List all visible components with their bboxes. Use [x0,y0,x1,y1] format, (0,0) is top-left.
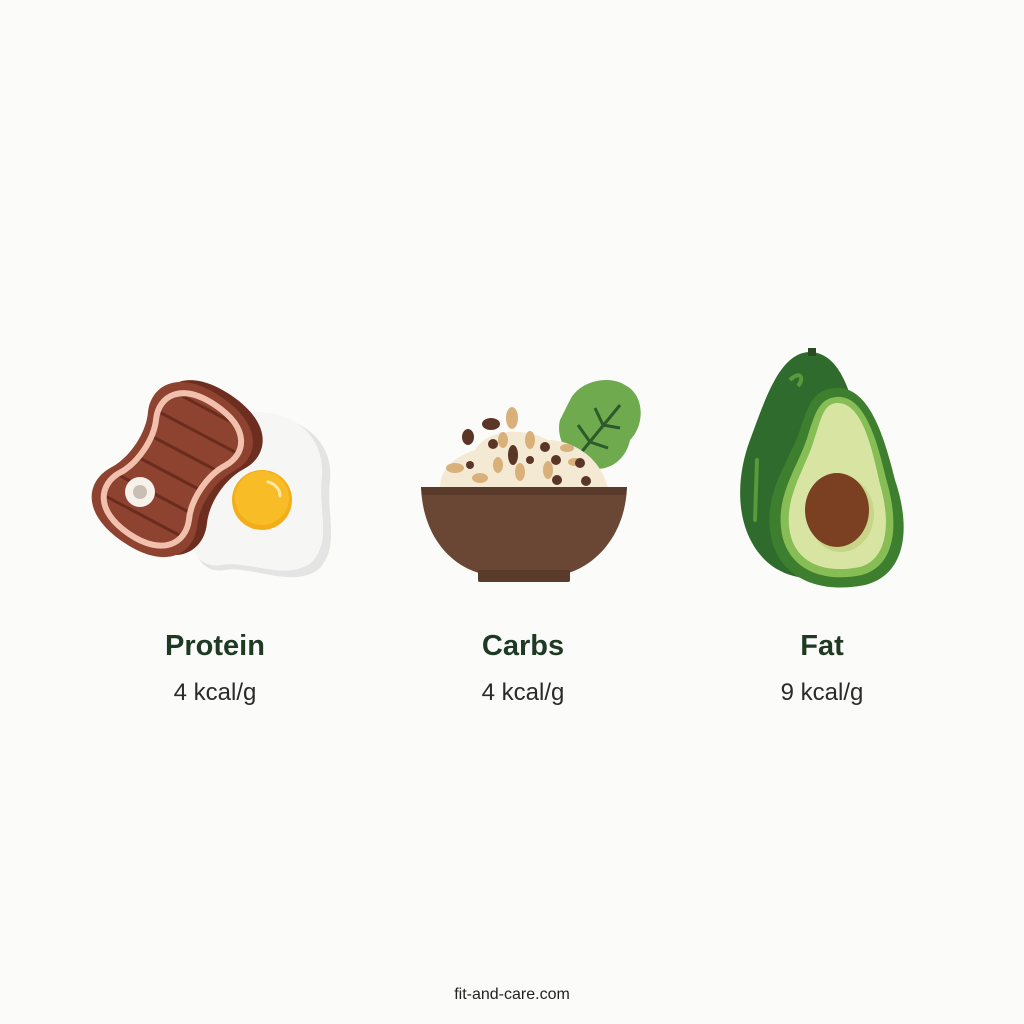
heading: Protein: Protein [165,630,265,662]
bowl [421,487,627,575]
icon: avocado [740,348,904,588]
egg [191,412,331,577]
heading: Carbs: Carbs [482,630,564,662]
text: fat kcal: 9 kcal/g [781,679,863,706]
footer: fit-and-care.com [454,986,570,1003]
steak [92,380,263,558]
icons [92,348,904,588]
icon: steak and egg [92,380,331,578]
heading: Fat: Fat [800,630,844,662]
leaf [559,380,641,469]
text: protein kcal: 4 kcal/g [174,679,256,706]
text: carbs kcal: 4 kcal/g [482,679,564,706]
icon: grain bowl [421,380,641,582]
grains mound [440,432,608,488]
